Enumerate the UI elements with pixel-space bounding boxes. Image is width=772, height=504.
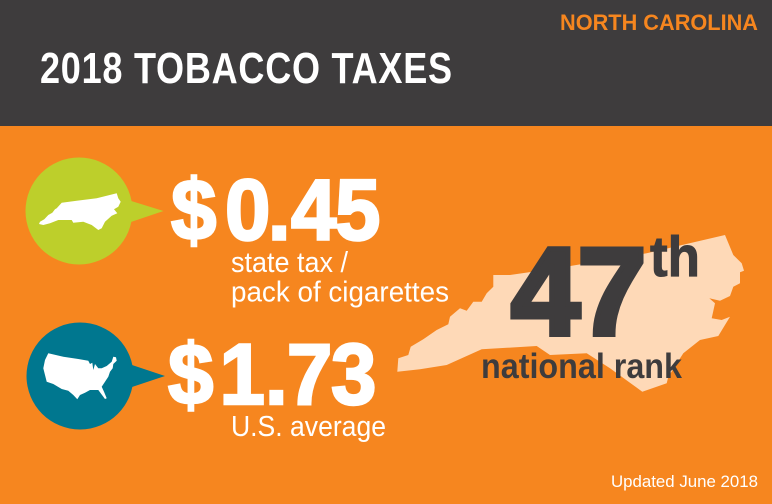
U.S. average label: U.S. average bbox=[231, 411, 386, 443]
state tax label bbox=[231, 247, 449, 308]
icon: North Carolina badge bbox=[26, 158, 164, 264]
state tax label: state tax / bbox=[231, 247, 349, 279]
state tax value: $0.45 bbox=[171, 162, 380, 258]
panel: state tax bbox=[26, 158, 449, 308]
update note: Updated June 2018 bbox=[611, 472, 758, 491]
rank number: 47 bbox=[511, 224, 646, 362]
icon: United States badge bbox=[26, 322, 165, 430]
panel: U.S. average bbox=[26, 322, 386, 443]
state tax label: pack of cigarettes bbox=[231, 276, 449, 308]
U.S. average value: $1.73 bbox=[168, 326, 376, 422]
state name: NORTH CAROLINA bbox=[560, 10, 758, 35]
rank suffix: th bbox=[650, 225, 700, 289]
header band bbox=[0, 0, 772, 126]
panel: national rank bbox=[397, 224, 744, 392]
title: 2018 TOBACCO TAXES bbox=[40, 44, 453, 93]
map: North Carolina bbox=[397, 235, 744, 392]
rank label: national rank bbox=[481, 347, 682, 386]
